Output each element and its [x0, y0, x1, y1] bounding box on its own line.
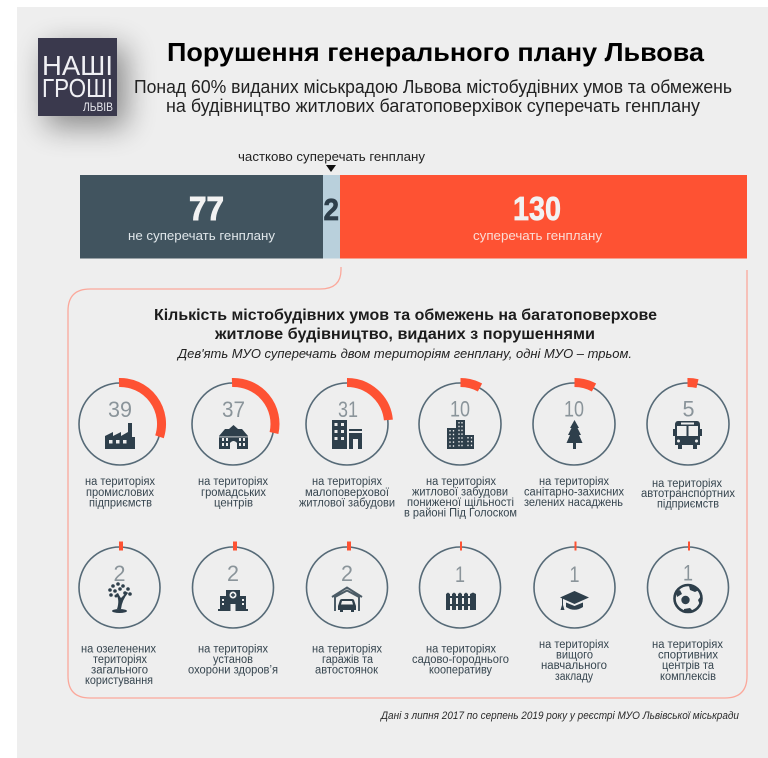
item: 1 sports: на територіях: [652, 639, 723, 651]
segment: no conflict 77: 77: [189, 190, 224, 227]
item: 2 healthcare: 2: [227, 561, 239, 586]
item: 2 green areas: [79, 546, 160, 687]
stacked bar: [80, 175, 747, 258]
item: 31 low-rise: на територіях: [312, 476, 382, 488]
segment: no conflict 77: [80, 175, 323, 258]
icon: leafy tree: [108, 582, 132, 613]
icon: bus: [673, 421, 702, 449]
item: 2 garages: на територіях: [312, 644, 382, 656]
item: 39 industrial: промислових: [86, 487, 154, 499]
item: 1 sports: комплексів: [660, 671, 716, 683]
icon: low-rise buildings: [332, 420, 362, 449]
item: 1 higher education: вищого: [556, 650, 593, 662]
item: 31 low-rise: 31: [338, 397, 358, 422]
icon: hospital: [218, 590, 248, 611]
item: 5 transport: [641, 382, 735, 510]
item: 31 low-rise: малоповерхової: [305, 487, 390, 499]
item: 1 garden cooperative: 1: [455, 562, 465, 587]
title: Порушення генерального плану Львова: [167, 37, 705, 67]
item: 1 higher education: навчального: [541, 660, 607, 672]
item: 37 public centres: на територіях: [198, 476, 268, 488]
item: 2 garages: автостоянок: [315, 664, 379, 676]
icon: football: [674, 585, 702, 612]
item: 2 healthcare: установ: [213, 654, 253, 666]
item: 2 green areas: загального: [91, 664, 148, 676]
item: 1 sports: центрів та: [662, 660, 715, 672]
item: 5 transport: на територіях: [652, 478, 722, 490]
item: 37 public centres: 37: [222, 397, 245, 422]
segment: conflict 130: [340, 175, 747, 258]
item: 1 higher education: 1: [570, 562, 580, 587]
item: 2 healthcare: [188, 546, 278, 676]
item: 10 low-density residential: на територіях: [426, 476, 496, 488]
item: 1 sports: 1: [683, 560, 693, 586]
item: 1 sports: [648, 546, 728, 683]
icon: fir tree: [566, 420, 582, 449]
section note: Дев'ять МУО суперечать двом територіям генплану, одні МУО – трьом.: [176, 346, 632, 361]
item: 31 low-rise: [299, 382, 395, 510]
source note: Дані з липня 2017 по серпень 2019 року у реєстрі МУО Львівської міськради: [379, 710, 739, 722]
item: 10 low-density residential: [404, 382, 517, 520]
outline frame: [68, 267, 747, 698]
item: 1 garden cooperative: на територіях: [426, 644, 496, 656]
item: 39 industrial: [79, 382, 162, 510]
section heading: [154, 307, 657, 343]
item: 2 green areas: 2: [114, 561, 126, 586]
item: 5 transport: підприємств: [657, 498, 719, 510]
item: 2 garages: гаражів та: [322, 654, 374, 666]
item: 10 green buffers: зелених насаджень: [524, 497, 623, 509]
item: 2 garages: 2: [341, 561, 353, 586]
partial label: частково суперечать генплану: [238, 149, 425, 164]
arrow: partial marker: [326, 165, 336, 172]
item: 2 healthcare: охорони здоров’я: [188, 664, 278, 676]
item: 1 garden cooperative: садово-городнього: [412, 654, 509, 666]
item: 2 green areas: користування: [85, 675, 153, 687]
segment: partial 2: [323, 175, 340, 258]
icon: dense blocks: [447, 420, 474, 449]
item: 37 public centres: центрів: [214, 498, 253, 510]
icon: factory: [105, 423, 135, 449]
item: 10 low-density residential: 10: [450, 396, 470, 422]
item: 5 transport: 5: [682, 396, 694, 422]
segment: conflict 130: суперечать генплану: [473, 228, 603, 243]
item: 39 industrial: на територіях: [85, 476, 155, 488]
subtitle: Понад 60% виданих міськрадою Львова містобудівних умов та обмежень: [134, 77, 732, 97]
section heading: житлове будівництво, виданих з порушеннями: [214, 326, 595, 343]
subtitle: [134, 77, 732, 116]
item: 10 green buffers: на територіях: [539, 476, 609, 488]
item: 1 higher education: [534, 546, 615, 683]
item: 1 garden cooperative: кооперативу: [429, 664, 492, 676]
logo: НАШІ: [42, 50, 113, 81]
icon: garage with car: [332, 588, 362, 612]
item: 39 industrial: підприємств: [89, 498, 152, 510]
item: 10 low-density residential: в районі Під Голоском: [404, 508, 517, 520]
item: 5 transport: автотранспортних: [641, 488, 735, 500]
item: 1 garden cooperative: [412, 546, 509, 676]
item: 1 sports: спортивних: [658, 650, 718, 662]
subtitle: на будівництво житлових багатоповерхівок суперечать генплану: [166, 96, 700, 116]
item: 2 green areas: територіях: [93, 654, 147, 666]
segment: conflict 130: 130: [513, 190, 561, 227]
item: 37 public centres: [192, 382, 275, 510]
item: 1 higher education: на територіях: [539, 639, 609, 651]
item: 2 green areas: на озеленених: [81, 644, 156, 656]
logo: ГРОШІ: [42, 73, 113, 103]
logo: [38, 38, 126, 127]
icon: fence: [446, 592, 476, 610]
logo: ЛЬВІВ: [83, 102, 113, 114]
item: 10 green buffers: санітарно-захисних: [524, 486, 624, 498]
segment: no conflict 77: не суперечать генплану: [128, 228, 276, 243]
icon: graduation cap: [560, 591, 589, 610]
segment: partial 2: 2: [324, 192, 339, 227]
item: 10 green buffers: 10: [564, 396, 584, 422]
item: 1 higher education: закладу: [555, 671, 593, 683]
icon: public building: [219, 425, 248, 449]
item: 39 industrial: 39: [108, 397, 132, 422]
item: 31 low-rise: житлової забудови: [299, 498, 395, 510]
section heading: Кількість містобудівних умов та обмежень на багатоповерхове: [154, 307, 657, 324]
item: 2 garages: [306, 546, 388, 676]
item: 10 green buffers: [524, 382, 624, 509]
item: 2 healthcare: на територіях: [198, 644, 268, 656]
item: 10 low-density residential: житлової забудови: [412, 486, 508, 498]
item: 37 public centres: громадських: [201, 487, 266, 499]
item: 10 low-density residential: пониженої щільності: [407, 497, 514, 509]
